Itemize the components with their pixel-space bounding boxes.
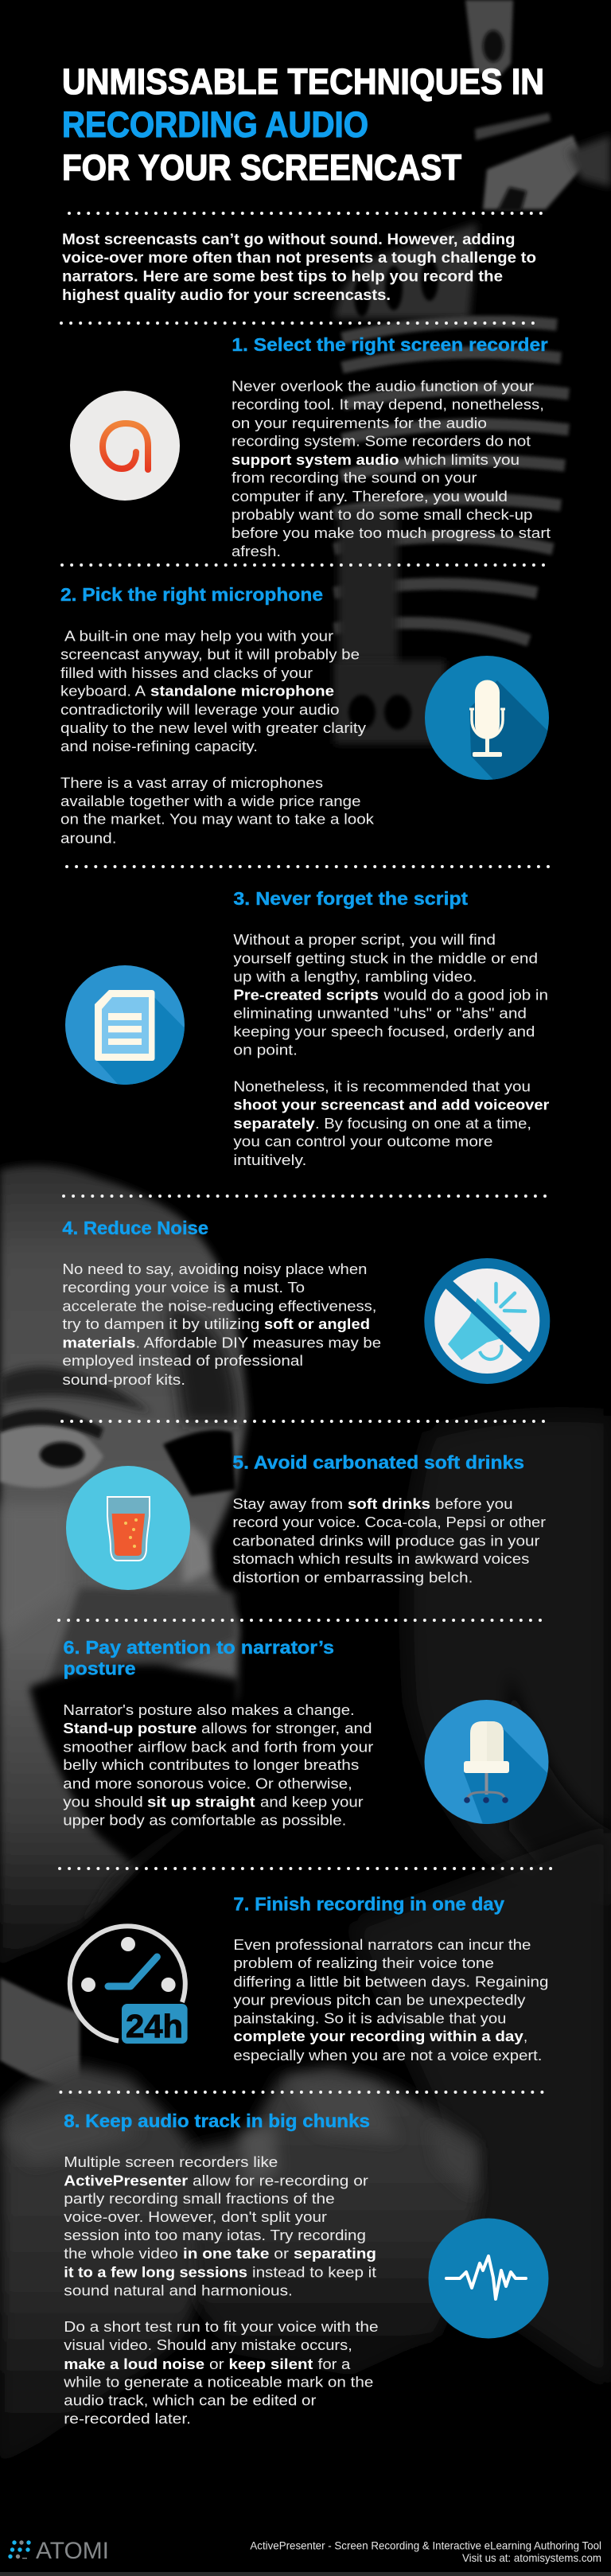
text block: tip 7: differing a little bit between days. Regaining (233, 1973, 548, 1989)
text block: tip 8 (63, 2153, 379, 2427)
text block: tip 3: up with a lengthy, rambling video. (233, 968, 477, 985)
intro text: highest quality audio for your screencasts. (62, 286, 391, 304)
text block: tip 5: Stay away from (232, 1495, 343, 1512)
text block: tip 2: contradictorily will leverage your audio (60, 701, 340, 718)
text block: tip 6: Narrator's posture also makes a change. (63, 1701, 355, 1718)
icon: office chair (425, 1700, 549, 1824)
text block: tip 8: ActivePresenter (64, 2172, 188, 2188)
text block: tip 8: separating (294, 2245, 376, 2262)
text block: tip 4: No need to say, avoiding noisy place when (62, 1261, 367, 1277)
footer text: Visit us at: atomisystems.com (462, 2551, 601, 2564)
text block: tip 7: especially when you are not a voice expert. (233, 2047, 542, 2064)
text block: tip 3: you can control your outcome more (233, 1133, 492, 1150)
text block: tip 5: before you (435, 1495, 513, 1512)
heading: tip 6: posture (64, 1658, 135, 1679)
text block: tip 4: . Affordable DIY measures may be (135, 1334, 381, 1350)
text block: tip 3 (233, 931, 549, 1168)
text block: tip 6: Stand-up posture (63, 1720, 197, 1736)
text block: tip 5: stomach which results in awkward voices (232, 1550, 529, 1567)
text block: tip 8: voice-over. However, don't split your (64, 2208, 327, 2225)
title: FOR YOUR SCREENCAST (62, 147, 461, 188)
text block: tip 5 (232, 1495, 546, 1585)
logo: Atomi: ATOMI (36, 2538, 109, 2564)
text block: tip 8: Multiple screen recorders like (64, 2153, 278, 2170)
text block: tip 1: recording system. Some recorders do not (232, 433, 531, 450)
text block: tip 8: while to generate a noticeable mark on the (63, 2373, 373, 2391)
intro text: narrators. Here are some best tips to help you record the (62, 267, 503, 285)
text block: tip 6: and keep your (260, 1794, 363, 1810)
heading: tip 2: 2. Pick the right microphone (60, 584, 323, 605)
text block: tip 8: Do a short test run to fit your voice with the (64, 2318, 379, 2335)
icon: microphone (425, 656, 549, 780)
text block: tip 1 (232, 377, 551, 559)
heading: tip 7: 7. Finish recording in one day (233, 1894, 504, 1915)
text block: tip 7 (233, 1936, 548, 2064)
text block: tip 8: in one take (183, 2245, 269, 2262)
text block: tip 6 (63, 1701, 373, 1828)
text block: tip 2: around. (60, 829, 116, 846)
icon: soft drink glass (66, 1466, 190, 1590)
heading: tip 1: 1. Select the right screen recorder (232, 334, 548, 355)
text block: tip 4 (62, 1261, 381, 1388)
text block: tip 6: sit up straight (147, 1794, 255, 1810)
text block: tip 8: audio track, which can be edited or (64, 2391, 316, 2408)
heading: tip 6: 6. Pay attention to narrator’s (64, 1637, 334, 1658)
panel: tip 1 select the right screen recorder (70, 334, 551, 559)
text block: tip 4: employed instead of professional (62, 1352, 303, 1369)
text block: tip 2: filled with hisses and clacks of your (60, 664, 313, 681)
text block: tip 7: Even professional narrators can incur the (233, 1936, 531, 1953)
intro text: Most screencasts can’t go without sound. However, adding (62, 231, 516, 248)
panel: tip 8 keep audio track in big chunks (63, 2110, 548, 2427)
text block: tip 7: your previous pitch can be unexpectedly (233, 1992, 526, 2009)
text block: tip 8: the whole video (64, 2245, 178, 2262)
heading: tip 5: 5. Avoid carbonated soft drinks (232, 1452, 524, 1473)
text block: tip 8: make a loud noise (64, 2356, 204, 2372)
text block: tip 3: eliminating unwanted "uhs" or "ahs" and (233, 1005, 527, 1022)
intro text (62, 231, 536, 304)
text block: tip 4: sound-proof kits. (62, 1371, 185, 1388)
text block: tip 8: visual video. Should any mistake occurs, (64, 2336, 352, 2353)
background photo: clenched fists (0, 1978, 479, 2464)
text block: tip 1: Never overlook the audio function of your (232, 377, 534, 395)
text block: tip 3: . By focusing on one at a time, (315, 1115, 531, 1132)
footer text (250, 2539, 601, 2564)
text block: tip 7: complete your recording within a day (233, 2028, 524, 2044)
text block: tip 6: allows for stronger, and (201, 1720, 372, 1736)
icon: 24h clock (70, 1926, 188, 2044)
text block: tip 1: before you make too much progress to start (232, 524, 551, 541)
background photo: pop filter (350, 1415, 611, 2387)
background photo: shouting narrator face (0, 1165, 247, 1966)
text block: tip 3: would do a good job in (383, 986, 548, 1003)
text block: tip 8: allow for re-recording or (193, 2172, 368, 2188)
text block: tip 7: problem of realizing their voice tone (233, 1954, 494, 1971)
icon: script document (65, 965, 191, 1090)
text block: tip 3: Nonetheless, it is recommended that you (233, 1078, 531, 1095)
heading: tip 4: 4. Reduce Noise (62, 1218, 208, 1238)
text block: tip 2: and noise-refining capacity. (60, 738, 258, 754)
text block: tip 2: There is a vast array of microphones (60, 774, 323, 791)
text block: tip 1: on your requirements for the audio (232, 415, 487, 431)
text block: tip 4: try to dampen it by utilizing (62, 1315, 259, 1332)
text block: tip 8: or (209, 2356, 224, 2372)
text block: tip 8: partly recording small fractions of the (64, 2190, 335, 2207)
text block: tip 8: session into too many iotas. Try recording (64, 2227, 366, 2243)
text block: tip 8: it to a few long sessions (64, 2264, 247, 2281)
heading: tip 3: 3. Never forget the script (233, 888, 468, 909)
text block: tip 3: intuitively. (233, 1152, 306, 1168)
text block: tip 8: sound natural and harmonious. (64, 2282, 293, 2298)
text block: tip 4: soft or angled (264, 1315, 370, 1332)
panel: tip 4 reduce noise (62, 1218, 545, 1388)
text block: tip 3: keeping your speech focused, orderly and (233, 1023, 535, 1039)
text block: tip 2: on the market. You may want to take a look (60, 811, 375, 828)
icon: ActivePresenter logo (70, 391, 180, 501)
text block: tip 1: support system audio (232, 451, 399, 468)
text block: tip 6: smoother airflow back and forth from your (63, 1738, 373, 1755)
panel: tip 7 finish recording in one day (70, 1894, 548, 2064)
icon: no noise megaphone (430, 1264, 545, 1378)
text block: tip 6: and more sonorous voice. Or otherwise, (63, 1775, 352, 1791)
icon: 24h clock: 24h (126, 2008, 183, 2044)
text block: tip 1: computer if any. Therefore, you would (232, 488, 508, 505)
heading: tip 6 (64, 1637, 334, 1679)
text block: tip 2: standalone microphone (150, 683, 334, 700)
text block: tip 6: you should (63, 1794, 143, 1810)
text block: tip 4: recording your voice is a must. To (62, 1279, 305, 1296)
title: RECORDING AUDIO (62, 104, 368, 145)
panel: tip 2 pick the right microphone (60, 584, 557, 846)
text block: tip 2: available together with a wide price range (60, 793, 361, 809)
background photo: vintage microphone (334, 0, 611, 744)
text block: tip 5: distortion or embarrassing belch. (232, 1569, 473, 1585)
text block: tip 3: Without a proper script, you will find (233, 931, 496, 948)
text block: tip 5: record your voice. Coca-cola, Pepsi or other (232, 1514, 546, 1530)
text block: tip 2: quality to the new level with greater clarity (60, 719, 367, 736)
text block: tip 1: which limits you (403, 451, 520, 468)
text block: tip 2: A built-in one may help you with your (64, 627, 333, 644)
text block: tip 8: instead to keep it (252, 2264, 376, 2281)
text block: tip 3: yourself getting stuck in the middle or end (233, 949, 538, 966)
text block: tip 8: keep silent (229, 2356, 313, 2372)
text block: tip 2: keyboard. A (60, 683, 146, 700)
panel: tip 5 avoid carbonated soft drinks (66, 1452, 546, 1590)
text block: tip 7: , (523, 2028, 527, 2044)
text block: tip 3: separately (233, 1115, 316, 1132)
text block: tip 3: on point. (233, 1041, 298, 1058)
footer text: ActivePresenter - Screen Recording & Interactive eLearning Authoring Tool (250, 2539, 601, 2552)
intro text: voice-over more often than not presents a tough challenge to (62, 249, 536, 267)
title (62, 61, 544, 188)
text block: tip 1: probably want to do some small check-up (232, 506, 533, 523)
text block: tip 1: from recording the sound on your (232, 470, 477, 486)
text block: tip 3: Pre-created scripts (233, 986, 379, 1003)
text block: tip 8: or (274, 2245, 289, 2262)
text block: tip 1: afresh. (232, 543, 281, 559)
heading: tip 8: 8. Keep audio track in big chunks (64, 2110, 370, 2131)
title: UNMISSABLE TECHNIQUES IN (62, 61, 544, 102)
text block: tip 3: shoot your screencast and add voiceover (233, 1097, 549, 1113)
text block: tip 2 (60, 627, 375, 846)
text block: tip 5: carbonated drinks will produce gas in your (232, 1533, 539, 1549)
icon: audio waveform (428, 2219, 549, 2338)
text block: tip 5: soft drinks (348, 1495, 430, 1512)
text block: tip 2: screencast anyway, but it will probably be (60, 646, 360, 663)
text block: tip 8: re-recorded later. (64, 2410, 191, 2427)
panel: tip 3 never forget the script (65, 888, 549, 1168)
text block: tip 1: recording tool. It may depend, nonetheless, (232, 396, 544, 413)
text block: tip 8: for a (318, 2356, 351, 2372)
panel: tip 6 pay attention to narrator's posture (63, 1637, 557, 1830)
text block: tip 7: painstaking. So it is advisable that you (233, 2009, 506, 2026)
text block: tip 6: upper body as comfortable as possible. (63, 1811, 346, 1828)
text block: tip 4: materials (62, 1334, 135, 1350)
text block: tip 6: belly which contributes to longer breaths (63, 1756, 359, 1773)
text block: tip 4: accelerate the noise-reducing effectiveness, (62, 1297, 376, 1314)
